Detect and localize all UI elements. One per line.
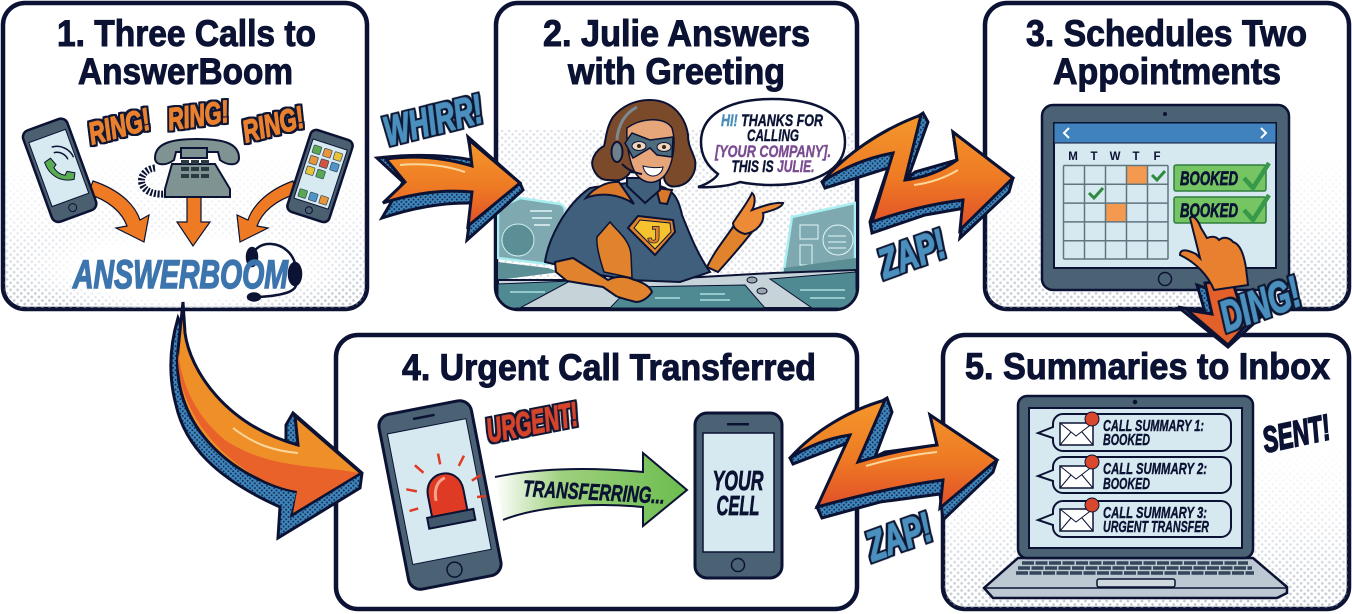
message 1: CALL SUMMARY 1: bbox=[1103, 418, 1204, 435]
speech bubble: HI! THANKS FOR bbox=[721, 111, 824, 130]
arrow: panel 4 to panel 5 zap bbox=[790, 398, 997, 520]
icon: pointing hand bbox=[1180, 217, 1248, 290]
icon: desk telephone bbox=[141, 139, 239, 197]
booked tags bbox=[1174, 163, 1269, 223]
superhero cape bbox=[572, 240, 683, 280]
resting arm and glove bbox=[555, 258, 652, 302]
message 1: BOOKED bbox=[1103, 432, 1150, 449]
siren bbox=[400, 446, 490, 532]
heading 2 bbox=[543, 13, 810, 92]
arrow: panel 2 to panel 3 zap bbox=[822, 113, 1013, 238]
arrow: panel 1 to panel 4 curved bbox=[171, 302, 362, 538]
heading 1 bbox=[57, 13, 316, 92]
weekday labels: T bbox=[1090, 151, 1098, 163]
message 2 bbox=[1038, 455, 1231, 493]
your cell phone: YOUR bbox=[712, 465, 764, 496]
sound effect: RING! x3 bbox=[85, 94, 308, 151]
calendar grid bbox=[1064, 166, 1168, 259]
heading 3: Appointments bbox=[1053, 51, 1281, 92]
sound effect: RING! x3: RING! bbox=[85, 102, 154, 151]
arrow: panel 1 to panel 2 bbox=[377, 137, 523, 240]
green transferring arrow bbox=[495, 453, 687, 526]
your cell phone: CELL bbox=[716, 490, 760, 521]
speech bubble: THIS IS JULIE. bbox=[732, 157, 814, 176]
message 3: CALL SUMMARY 3: bbox=[1103, 505, 1207, 522]
headset bbox=[617, 107, 637, 140]
message 3 bbox=[1038, 498, 1231, 537]
icon: headset bbox=[247, 244, 301, 300]
weekday labels: M bbox=[1068, 151, 1078, 163]
laptop bbox=[984, 396, 1287, 598]
message 2: BOOKED bbox=[1103, 476, 1150, 493]
message 2: CALL SUMMARY 2: bbox=[1103, 461, 1207, 478]
arrow: panel 3 to panel 5 ding bbox=[1178, 280, 1262, 347]
tablet with calendar bbox=[1042, 105, 1289, 290]
neck collar bbox=[627, 178, 660, 203]
panel 5: summaries to inbox bbox=[943, 335, 1349, 609]
weekday labels: W bbox=[1110, 151, 1121, 163]
character: Julie superhero receptionist bbox=[545, 100, 783, 302]
chest emblem: J bbox=[647, 222, 661, 249]
sound effect: DING!: DING! bbox=[1213, 267, 1307, 342]
panel 1: three calls to AnswerBoom bbox=[3, 3, 367, 318]
logo: ANSWERBOOM: ANSWERBOOM bbox=[72, 253, 289, 297]
weekday labels: F bbox=[1153, 151, 1161, 163]
phone with red siren bbox=[377, 399, 503, 591]
hair bbox=[592, 100, 695, 187]
sound effect: ZAP! top: ZAP! bbox=[871, 220, 952, 287]
message 3: URGENT TRANSFER bbox=[1103, 519, 1209, 536]
heading 2: 2. Julie Answers bbox=[543, 13, 810, 54]
face bbox=[627, 120, 674, 182]
green transferring arrow: TRANSFERRING... bbox=[522, 475, 665, 509]
panel 2: Julie answers with greeting bbox=[496, 3, 857, 309]
speech bubble: CALLING bbox=[747, 126, 799, 145]
pointing arm and hand bbox=[707, 227, 752, 272]
sound effect: WHIRR!: WHIRR! bbox=[379, 86, 487, 154]
chest emblem bbox=[628, 216, 675, 255]
sound effect: RING! x3: RING! bbox=[165, 94, 231, 137]
heading 3: 3. Schedules Two bbox=[1026, 13, 1307, 54]
heading 1: 1. Three Calls to bbox=[57, 13, 316, 54]
sound effect: ZAP! bottom: ZAP! bbox=[859, 503, 938, 570]
heading 1: AnswerBoom bbox=[78, 51, 293, 92]
heading 4: 4. Urgent Call Transferred bbox=[402, 347, 816, 388]
booked tags: BOOKED bbox=[1180, 201, 1238, 222]
smile bbox=[643, 166, 663, 176]
arrows into AnswerBoom bbox=[88, 181, 296, 246]
mask bbox=[625, 133, 673, 158]
panel 3: schedules two appointments bbox=[985, 3, 1349, 309]
heading 3 bbox=[1026, 13, 1307, 92]
control-room console bbox=[498, 198, 856, 308]
speech bubble: [YOUR COMPANY]. bbox=[714, 142, 831, 161]
speech bubble bbox=[698, 99, 845, 187]
icon: right phone with apps bbox=[286, 128, 354, 224]
side panel bbox=[597, 222, 632, 278]
heading 2: with Greeting bbox=[567, 51, 785, 92]
booked tags: BOOKED bbox=[1180, 169, 1238, 190]
your cell phone bbox=[695, 413, 782, 578]
panel 4: urgent call transferred bbox=[336, 335, 857, 609]
sound effect: RING! x3: RING! bbox=[239, 100, 308, 149]
weekday labels: T bbox=[1132, 151, 1140, 163]
costume body bbox=[545, 183, 710, 282]
shoulder cape trim bbox=[586, 182, 672, 204]
sound effect: URGENT!: URGENT! bbox=[483, 396, 581, 450]
message 1 bbox=[1038, 412, 1231, 451]
icon: left phone with ringing call bbox=[21, 117, 98, 224]
weekday labels bbox=[1068, 151, 1161, 163]
heading 5: 5. Summaries to Inbox bbox=[965, 346, 1330, 387]
